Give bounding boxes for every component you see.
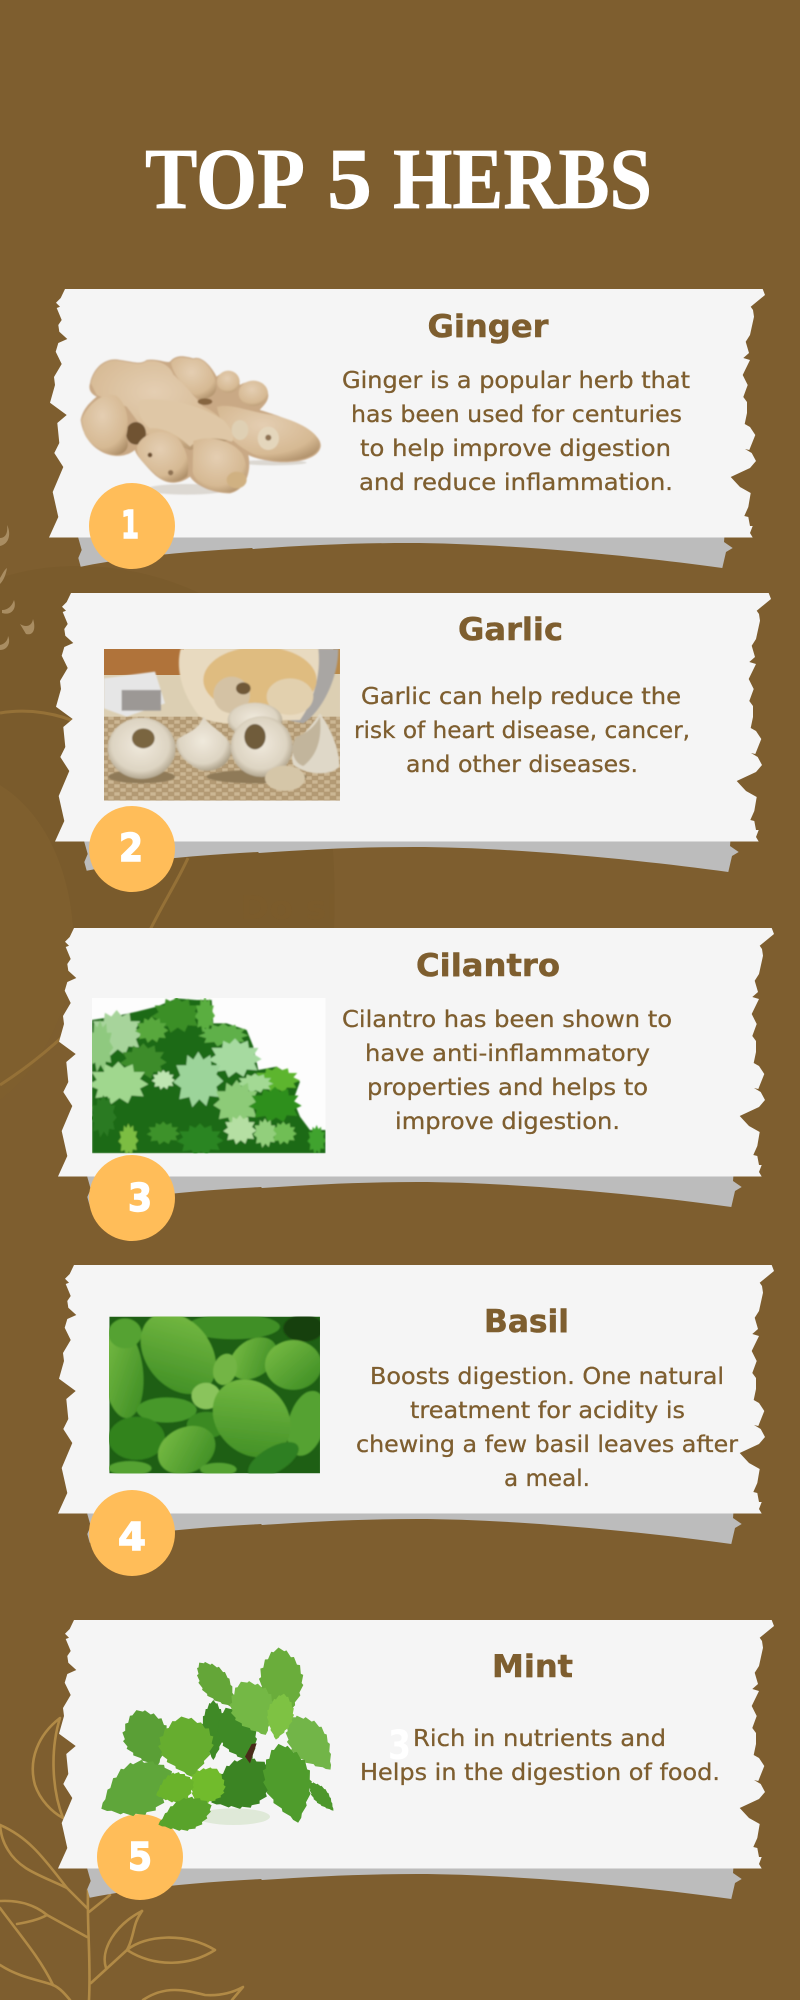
description: and other diseases. xyxy=(406,750,638,778)
title: HERBS xyxy=(393,130,652,227)
number badge 3: 3 xyxy=(128,1176,152,1220)
description: chewing a few basil leaves after xyxy=(356,1430,738,1458)
description: Ginger is a popular herb that xyxy=(342,366,690,394)
description: risk of heart disease, cancer, xyxy=(354,716,690,744)
faint background text: Do sk xyxy=(240,888,351,927)
paper shadow xyxy=(78,529,733,568)
description xyxy=(356,1362,738,1492)
description: a meal. xyxy=(504,1464,590,1492)
title: 5 xyxy=(327,130,372,227)
torn paper card xyxy=(58,1620,774,1868)
description: Rich in nutrients and xyxy=(413,1724,666,1752)
paper shadow xyxy=(84,833,739,872)
photo: cilantro bunch xyxy=(87,997,326,1156)
description: Garlic can help reduce the xyxy=(361,682,681,710)
description: has been used for centuries xyxy=(351,400,682,428)
description: improve digestion. xyxy=(395,1107,620,1135)
number badge 1: 1 xyxy=(121,503,139,547)
description: Cilantro has been shown to xyxy=(342,1005,672,1033)
photo: garlic bulbs and bowl xyxy=(104,647,340,801)
description xyxy=(354,682,690,778)
description: and reduce inflammation. xyxy=(359,468,673,496)
description xyxy=(342,366,690,496)
background decoration: upper left shapes xyxy=(0,525,335,1100)
heading: Ginger xyxy=(428,309,549,345)
torn paper card xyxy=(58,928,774,1176)
description xyxy=(342,1005,672,1135)
background decoration: bottom left branch xyxy=(0,1718,243,2000)
number badge 1 xyxy=(89,483,175,569)
panel: ginger xyxy=(49,289,765,569)
panel: mint xyxy=(58,1620,774,1900)
paper shadow xyxy=(87,1505,742,1544)
title: TOP xyxy=(145,130,305,227)
heading: Garlic xyxy=(458,612,563,648)
description: Boosts digestion. One natural xyxy=(370,1362,724,1390)
number badge 4 xyxy=(89,1490,175,1576)
torn paper card xyxy=(58,1265,774,1514)
description: treatment for acidity is xyxy=(410,1396,685,1424)
number badge 4: 4 xyxy=(118,1515,146,1559)
number badge 3 xyxy=(89,1155,175,1241)
panel: cilantro xyxy=(58,928,774,1241)
photo: ginger root xyxy=(81,356,321,495)
number badge 2 xyxy=(89,806,175,892)
photo: basil leaves xyxy=(109,1316,320,1474)
heading: Cilantro xyxy=(416,948,560,984)
paper shadow xyxy=(87,1860,742,1899)
description xyxy=(360,1724,720,1786)
number badge 2: 2 xyxy=(119,826,143,870)
number 5: 5 xyxy=(128,1835,152,1879)
panel: garlic xyxy=(55,593,771,892)
stray white numeral: 3 xyxy=(388,1723,411,1769)
torn paper card xyxy=(55,593,771,842)
description: to help improve digestion xyxy=(360,434,671,462)
paper shadow xyxy=(87,1168,742,1207)
panel: basil xyxy=(58,1265,774,1576)
photo: mint sprig xyxy=(89,1646,346,1840)
description: properties and helps to xyxy=(367,1073,648,1101)
title xyxy=(145,130,652,227)
description: Helps in the digestion of food. xyxy=(360,1758,720,1786)
number badge 5 circle xyxy=(97,1814,183,1900)
heading: Mint xyxy=(492,1649,573,1685)
torn paper card xyxy=(49,289,765,538)
heading: Basil xyxy=(484,1304,569,1340)
description: have anti-inflammatory xyxy=(365,1039,650,1067)
